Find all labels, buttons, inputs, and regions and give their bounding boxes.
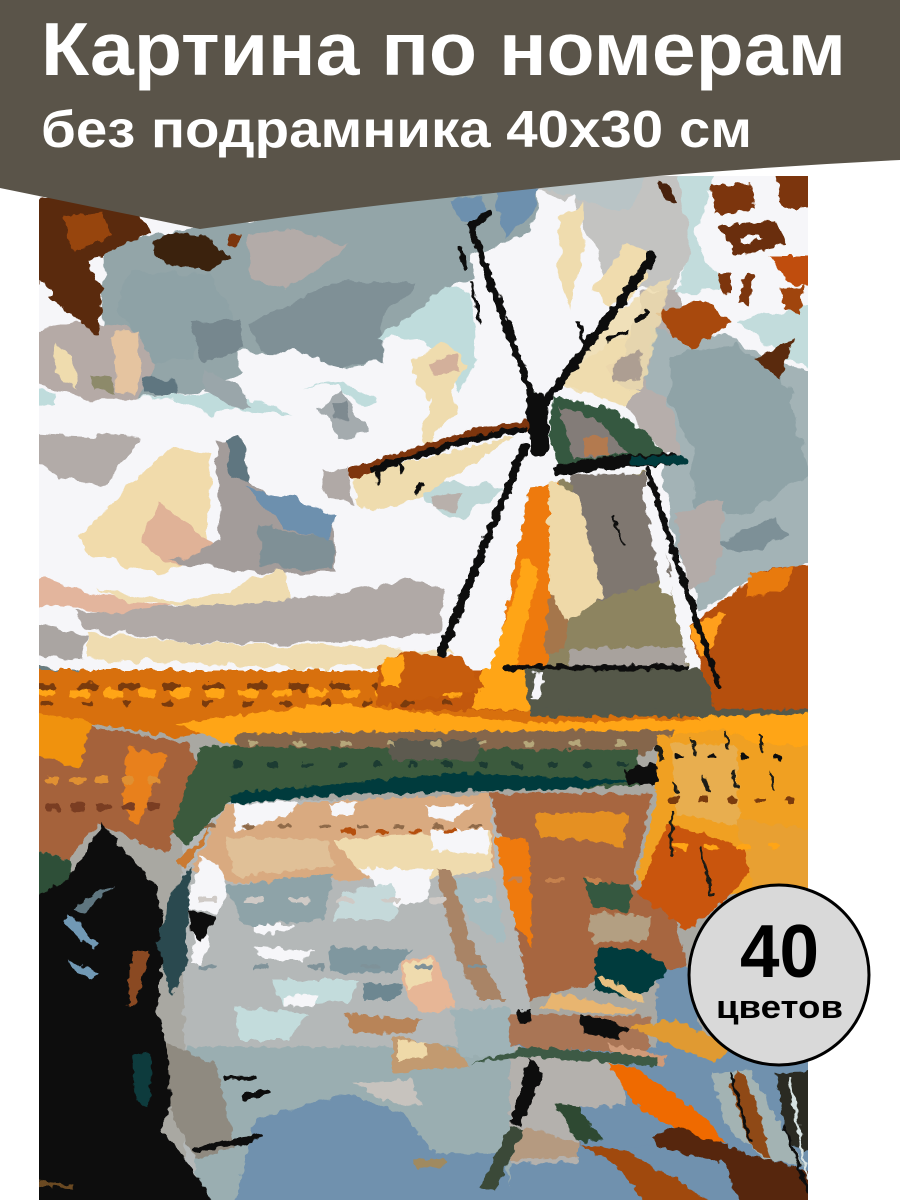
badge: 40 colours: цветов bbox=[716, 989, 843, 1025]
title: Картина по номерам bbox=[41, 7, 846, 91]
reflection and water bbox=[181, 793, 824, 1200]
windmill base bbox=[472, 667, 712, 712]
reed strokes bbox=[39, 733, 808, 1193]
underpainting: land and water bbox=[39, 724, 737, 1158]
tree: top left bbox=[29, 196, 240, 336]
badge: 40 colours bbox=[689, 885, 869, 1065]
badge: 40 colours: 40 bbox=[740, 909, 819, 993]
windmill bbox=[472, 395, 712, 712]
windmill sails bbox=[353, 276, 672, 511]
tree: centre bbox=[377, 653, 485, 706]
subtitle: без подрамника 40х30 см bbox=[41, 101, 752, 159]
dark left bank and reeds bbox=[24, 670, 824, 1200]
painting: windmill landscape bbox=[24, 169, 824, 1200]
windmill body bbox=[490, 473, 689, 669]
tree: top right bbox=[657, 173, 824, 379]
sky clouds bbox=[29, 169, 824, 686]
speckled reed texture bbox=[39, 687, 808, 1180]
windmill black frame bbox=[353, 214, 718, 686]
trees bbox=[29, 173, 824, 709]
windmill cap bbox=[549, 396, 669, 468]
header band bbox=[0, 0, 900, 229]
tree: right bbox=[689, 563, 824, 709]
